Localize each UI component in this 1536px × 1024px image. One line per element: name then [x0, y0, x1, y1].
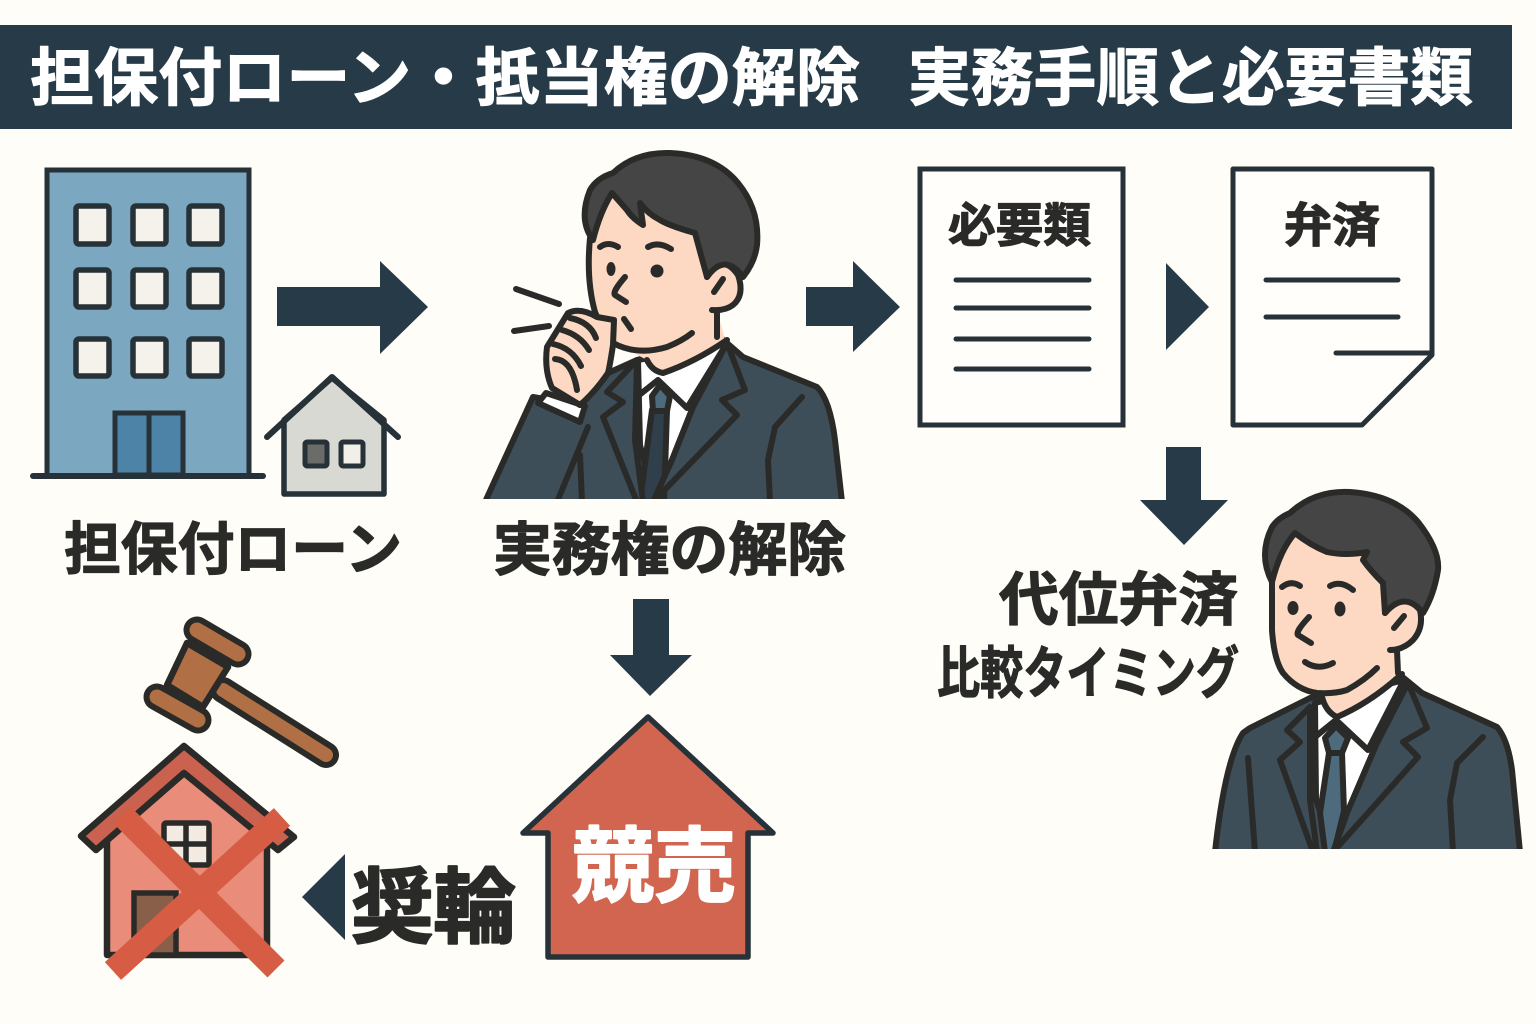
fist: [546, 311, 614, 405]
ear: [1385, 601, 1421, 650]
arrow: down to auction: [610, 599, 692, 696]
bottom trim: [478, 499, 850, 508]
hair: [585, 153, 757, 277]
arrow: between documents: [1166, 263, 1209, 350]
lapels: [603, 360, 643, 502]
shirt: [1315, 680, 1404, 852]
suit body: [1215, 675, 1520, 852]
suit body: [485, 337, 842, 502]
arrow: person to documents: [806, 261, 900, 352]
person: smiling businessman: [1208, 492, 1530, 858]
necktie: [640, 410, 667, 502]
facial features: [606, 262, 616, 276]
document: repayment: [1233, 169, 1432, 425]
document: required papers: [920, 169, 1123, 425]
icon: small house: [267, 377, 398, 494]
icon: crossed-out house: [81, 746, 294, 971]
label: secured loan: 担保付ローン: [64, 518, 402, 582]
document: required papers: 必要類: [948, 199, 1091, 252]
icon: auction house with label: 競売: [572, 822, 736, 913]
label: subrogation and timing: 比較タイミング: [937, 642, 1239, 705]
arrow: loan to person: [277, 261, 428, 354]
face outline, chin, neck, collar: [589, 238, 601, 326]
bottom trim: [1208, 849, 1530, 858]
document: repayment: 弁済: [1284, 199, 1380, 252]
breath lines: [516, 289, 559, 304]
icon: auction house with label: [523, 717, 773, 957]
label: subrogation and timing: 代位弁済: [999, 568, 1238, 633]
label: subrogation and timing: [937, 568, 1239, 705]
icon: gavel: [157, 630, 326, 755]
cuff: [538, 393, 585, 422]
title banner: 実務手順と必要書類: [908, 44, 1473, 114]
label: release of rights: 実務権の解除: [493, 518, 846, 583]
face skin: [588, 193, 725, 373]
shirt: [638, 343, 727, 502]
icon: office building: [33, 170, 263, 476]
label: foreclosure transfer: 奨輪: [351, 863, 516, 954]
person: thinking businessman: [478, 153, 850, 508]
arrow: auction to seized house: [302, 854, 345, 940]
lapels: [1280, 707, 1317, 852]
hair: [1265, 492, 1438, 613]
red cross mark: [113, 815, 282, 971]
title banner: [0, 25, 1512, 129]
face outline, chin, neck, collar: [1272, 582, 1377, 693]
necktie: [1320, 753, 1344, 852]
face skin: [1272, 533, 1400, 717]
title banner: 担保付ローン・抵当権の解除: [30, 44, 860, 114]
ear: [707, 264, 741, 310]
facial features: [1288, 601, 1298, 615]
arrow: down to subrogation: [1140, 447, 1228, 545]
